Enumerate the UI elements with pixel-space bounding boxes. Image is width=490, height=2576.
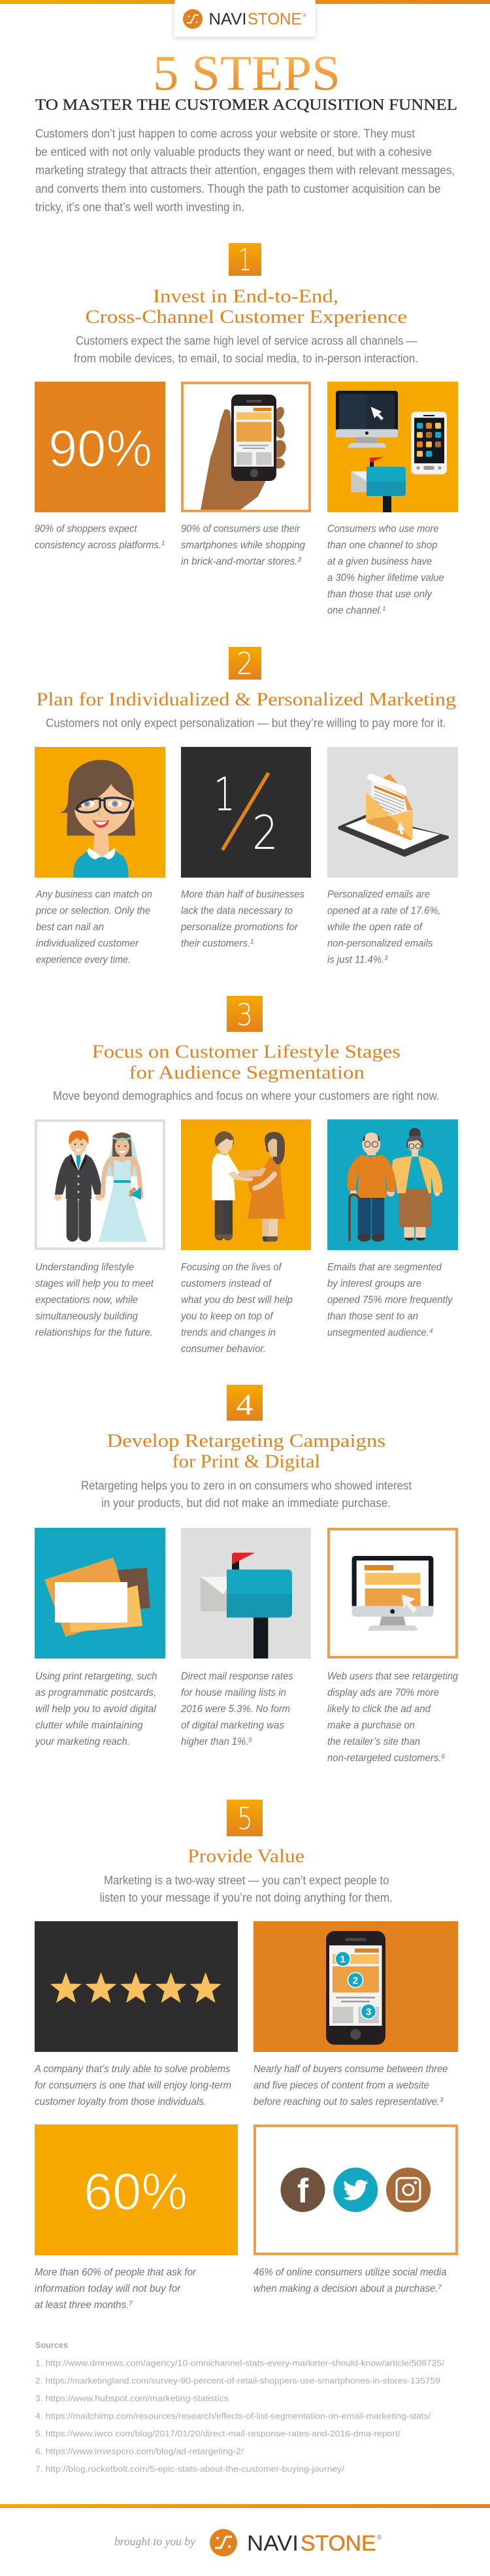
caption: lifetime value	[327, 523, 444, 616]
intro paragraph: Customers don’t just happen to come across your website or store. They must	[35, 127, 415, 140]
caption: social media: 46% of online consumers utilize social media	[253, 2267, 447, 2278]
caption: direct mail response: 2016 were 5.3%. No form	[180, 1704, 290, 1715]
panel: one half stat	[181, 747, 311, 878]
panel: five stars	[35, 1921, 238, 2052]
caption: direct mail response: for house mailing lists in	[181, 1687, 286, 1698]
caption: lack the data	[180, 889, 304, 949]
step 3 description: Move beyond demographics and focus on where your customers are right now.	[53, 1089, 439, 1102]
step number 2: 2	[237, 646, 253, 682]
sources list	[35, 2340, 444, 2474]
sources list: 1. http://www.dmnews.com/agency/10-omnichannel-stats-every-marketer-should-know/article/508725/	[35, 2358, 444, 2368]
icon: open envelope	[366, 774, 413, 840]
figure: old man	[348, 1132, 396, 1242]
caption: display ads: make a purchase on	[327, 1720, 415, 1731]
caption: lives of customers: customers instead of	[181, 1278, 272, 1289]
caption: 60% not buying: information today will not buy for	[35, 2283, 181, 2294]
caption: individualized experience	[35, 889, 152, 966]
logo: Navistone top: NAVI	[209, 10, 247, 29]
panel: devices and mailbox	[327, 382, 458, 512]
caption: 60% not buying: at least three months.⁷	[35, 2300, 133, 2311]
caption: print retargeting: your marketing reach.	[35, 1736, 130, 1747]
logo: Navistone footer: ®	[377, 2534, 382, 2541]
panel: mailbox	[181, 1528, 311, 1659]
caption: individualized experience: price or selection. Only the	[35, 906, 150, 917]
step 2 section	[35, 646, 458, 966]
step 5 description	[100, 1874, 393, 1904]
caption: 90% consistency: 90% of shoppers expect	[35, 523, 137, 535]
caption: loyalty: for consumers is one that will enjoy long-term	[35, 2080, 231, 2091]
step 2 description: Customers not only expect personalization — but they’re willing to pay more for it.	[46, 717, 446, 730]
panel: hand holding phone	[182, 383, 310, 511]
logo: Navistone top	[174, 0, 316, 37]
caption: lifetime value: a 30% higher lifetime value	[327, 572, 444, 584]
step number 5: 5	[237, 1801, 253, 1836]
panel: postcards	[35, 1528, 165, 1659]
step 4 description: Retargeting helps you to zero in on consumers who showed interest	[81, 1479, 412, 1492]
step 5 section	[34, 1800, 458, 2311]
caption: 60% not buying: More than 60% of people that ask for	[35, 2267, 197, 2278]
caption: lives of customers: trends and changes in	[181, 1327, 276, 1338]
panel: 90% stat	[35, 382, 165, 512]
figure: groom	[55, 1131, 103, 1242]
step number 3: 3	[237, 997, 253, 1032]
caption: display ads: the retailer’s site than	[327, 1736, 420, 1747]
panel: email on tablet	[327, 747, 458, 878]
step 4 heading: for Print & Digital	[172, 1451, 320, 1472]
intro paragraph: tricky, it’s one that’s well worth investing in.	[35, 201, 244, 214]
caption: print retargeting: clutter while maintaining	[35, 1720, 143, 1731]
icon: mailbox	[351, 457, 406, 512]
figure: woman	[228, 1132, 285, 1242]
logo: Navistone top: ®	[303, 13, 307, 18]
caption: email open rates: while the open rate of	[327, 922, 423, 933]
panel: 60% stat	[35, 2124, 238, 2255]
step 4 description	[81, 1479, 412, 1510]
logo: Navistone footer	[210, 2529, 382, 2556]
icon: facebook	[281, 2168, 325, 2212]
step 1 heading: Invest in End-to-End,	[153, 286, 338, 307]
intro paragraph: and converts them into customers. Though the path to customer acquisition can be	[35, 182, 440, 195]
step number 2	[229, 646, 261, 682]
step 2 heading: Plan for Individualized & Personalized Marketing	[37, 689, 456, 710]
caption: smartphones while shopping	[181, 523, 305, 567]
intro paragraph: marketing strategy that attracts their attention, engages them with relevant messages,	[35, 164, 455, 177]
caption: smartphones while shopping: 90% of consumers use their	[181, 523, 301, 535]
panel: expecting couple	[181, 1119, 311, 1250]
panel: social media icons	[255, 2126, 457, 2254]
step number 1	[229, 242, 261, 278]
caption: lifetime value: than those that use only	[327, 589, 433, 600]
caption: lack the data: lack the data necessary to	[181, 906, 293, 917]
caption: lifetime value: Consumers who use more	[327, 523, 439, 535]
caption: print retargeting	[35, 1671, 157, 1747]
step number 4: 4	[237, 1388, 253, 1421]
caption: direct mail response: of digital marketing was	[181, 1720, 284, 1731]
panel: wedding couple	[36, 1121, 164, 1249]
panel: one half stat: 1	[214, 768, 235, 821]
caption: display ads: Web users that see retargeting	[327, 1671, 458, 1682]
caption: display ads: likely to click the ad and	[327, 1704, 431, 1715]
step 1 description	[74, 335, 418, 365]
step number 4	[227, 1385, 263, 1421]
step number 5	[227, 1800, 263, 1836]
sources list: 6. https://www.invespcro.com/blog/ad-retargeting-2/	[35, 2447, 244, 2456]
caption: email open rates: is just 11.4%.³	[327, 955, 388, 966]
caption: lifestyle stages: simultaneously building	[35, 1311, 138, 1322]
caption: social media	[253, 2267, 447, 2294]
badge 3	[361, 2004, 376, 2019]
caption: individualized experience: individualized customer	[36, 938, 139, 949]
step 1 description: Customers expect the same high level of service across all channels —	[76, 335, 417, 348]
step 3 heading: Focus on Customer Lifestyle Stages	[92, 1042, 400, 1063]
sources list: 2. https://marketingland.com/survey-90-percent-of-retail-shoppers-use-smartphones-in-stores-135759	[35, 2375, 440, 2385]
caption: lifetime value: one channel.¹	[327, 605, 385, 616]
caption: loyalty: customer loyalty from those individuals.	[35, 2096, 206, 2107]
step 3 heading	[92, 1042, 400, 1083]
caption: lives of customers: you to keep on top of	[180, 1311, 274, 1322]
caption: lifestyle stages: Understanding lifestyle	[35, 1262, 134, 1273]
caption: print retargeting: as programmatic postcards,	[35, 1687, 156, 1698]
step 5 description: listen to your message if you’re not doing anything for them.	[100, 1891, 393, 1904]
caption: 90% consistency	[35, 523, 165, 551]
sources list: 5. https://www.iwco.com/blog/2017/01/20/direct-mail-response-rates-and-2016-dma-report/	[35, 2429, 400, 2439]
caption: segmented emails: than those sent to an	[327, 1311, 418, 1322]
icon: tablet	[338, 815, 449, 857]
caption: content consumption: and five pieces of content from a website	[253, 2080, 429, 2091]
caption: lifestyle stages	[35, 1262, 154, 1338]
caption: social media: when making a decision about a purchase.⁷	[253, 2283, 442, 2294]
step 5 heading: Provide Value	[188, 1845, 304, 1866]
caption: content consumption	[253, 2064, 448, 2107]
icon: twitter	[333, 2168, 378, 2212]
icon: smartphone	[411, 412, 447, 474]
step 4 section	[35, 1385, 458, 1764]
step 1 description: from mobile devices, to email, to social media, to in-person interaction.	[74, 352, 418, 365]
caption: email open rates: non-personalized emails	[327, 938, 433, 949]
caption: loyalty: A company that’s truly able to solve problems	[34, 2064, 231, 2075]
caption: print retargeting: will help you to avoid digital	[35, 1704, 156, 1715]
caption: lack the data: their customers.¹	[181, 938, 253, 949]
caption: print retargeting: Using print retargeting, such	[35, 1671, 157, 1682]
caption: segmented emails	[327, 1262, 453, 1338]
caption: individualized experience: experience every time.	[36, 955, 131, 966]
panel: monitor with ad	[329, 1529, 457, 1657]
badge 1: 1	[340, 1954, 346, 1965]
caption: direct mail response: higher than 1%.⁵	[181, 1736, 253, 1747]
panel: 60% stat: 60%	[84, 2162, 188, 2221]
sources list: Sources	[35, 2340, 68, 2350]
step 1 heading: Cross-Channel Customer Experience	[85, 306, 407, 327]
caption: individualized experience: best can nail an	[36, 922, 104, 933]
caption: lives of customers: consumer behavior.	[181, 1344, 266, 1355]
badge 2: 2	[353, 1975, 358, 1986]
caption: email open rates	[327, 889, 440, 966]
caption: lack the data: personalize promotions for	[180, 922, 299, 933]
caption: smartphones while shopping: smartphones while shopping	[181, 540, 305, 551]
intro paragraph: be enticed with not only valuable products they want or need, but with a cohesive	[35, 146, 432, 159]
caption: segmented emails: opened 75% more frequently	[327, 1295, 453, 1306]
panel: elderly couple	[327, 1119, 458, 1250]
caption: segmented emails: by interest groups are	[327, 1278, 421, 1289]
caption: content consumption: before reaching out to sales representative.³	[253, 2096, 444, 2107]
caption: lack the data: More than half of businesses	[181, 889, 304, 900]
footer: brought to you by: brought to you by	[114, 2535, 195, 2548]
sources list: 3. https://www.hubspot.com/marketing-statistics	[35, 2393, 229, 2403]
caption: lifetime value: at a given business have	[327, 556, 432, 567]
panel: woman with glasses	[35, 747, 165, 878]
logo: Navistone footer: STONE	[301, 2531, 376, 2555]
caption: email open rates: opened at a rate of 17.6%,	[327, 906, 440, 917]
caption: lifestyle stages: expectations now, while	[35, 1295, 138, 1306]
caption: display ads: non-retargeted customers.⁶	[327, 1753, 446, 1764]
caption: lifestyle stages: relationships for the future.	[35, 1327, 153, 1338]
intro paragraph	[35, 127, 455, 214]
caption: lives of customers	[180, 1262, 293, 1355]
footer bar	[0, 2504, 490, 2508]
sources list: 4. https://mailchimp.com/resources/research/effects-of-list-segmentation-on-email-marketing-stats/	[35, 2411, 431, 2420]
caption: email open rates: Personalized emails are	[327, 889, 430, 900]
icon: facebook: f	[297, 2172, 309, 2210]
step 4 heading: Develop Retargeting Campaigns	[107, 1430, 385, 1451]
step 3 heading: for Audience Segmentation	[129, 1063, 365, 1083]
step 5 description: Marketing is a two-way street — you can’t expect people to	[104, 1874, 389, 1887]
caption: 90% consistency: consistency across platforms.¹	[35, 540, 165, 551]
header bar	[0, 0, 490, 4]
caption: smartphones while shopping: in brick-and-mortar stores.²	[181, 556, 301, 567]
figure: man	[212, 1131, 240, 1240]
caption: direct mail response: Direct mail response rates	[181, 1671, 293, 1682]
panel: phone with numbered content	[253, 1921, 458, 2052]
caption: display ads: display ads are 70% more	[327, 1687, 439, 1698]
step 3 section	[35, 996, 458, 1355]
panel: one half stat: 2	[252, 806, 278, 860]
badge 2	[348, 1972, 363, 1988]
caption: content consumption: Nearly half of buyers consume between three	[253, 2064, 448, 2075]
logo: Navistone top: STONE	[248, 10, 302, 29]
step number 3	[227, 996, 263, 1032]
step 1 section	[35, 242, 458, 616]
sources list: 7. http://blog.rocketbolt.com/5-epic-stats-about-the-customer-buying-journey/	[35, 2464, 344, 2474]
logo: Navistone footer: NAVI	[247, 2531, 299, 2555]
figure: old woman	[390, 1128, 442, 1241]
caption: segmented emails: Emails that are segmented	[327, 1262, 442, 1273]
caption: lives of customers: Focusing on the lives of	[181, 1262, 282, 1273]
icon: desktop monitor	[336, 391, 398, 448]
caption: lives of customers: what you do best will help	[181, 1295, 293, 1306]
figure: bride	[99, 1132, 147, 1242]
badge 1	[335, 1951, 350, 1966]
caption: display ads	[327, 1671, 458, 1764]
caption: lifetime value: than one channel to shop	[327, 540, 438, 551]
caption: segmented emails: unsegmented audience.⁴	[327, 1327, 433, 1338]
icon: instagram	[386, 2168, 431, 2212]
title: 5 STEPS	[153, 46, 340, 101]
step 4 heading	[107, 1430, 385, 1472]
caption: individualized experience: Any business can match on	[35, 889, 152, 900]
panel: 90% stat: 90%	[48, 419, 152, 477]
badge 3: 3	[366, 2006, 371, 2017]
step number 1: 1	[238, 242, 252, 278]
caption: lifestyle stages: stages will help you to meet	[35, 1278, 154, 1289]
caption: 60% not buying	[35, 2267, 197, 2311]
caption: direct mail response	[180, 1671, 293, 1747]
caption: loyalty	[34, 2064, 231, 2107]
step 1 heading	[85, 286, 407, 327]
subtitle: TO MASTER THE CUSTOMER ACQUISITION FUNNEL	[35, 97, 457, 114]
step 4 description: in your products, but did not make an immediate purchase.	[101, 1496, 391, 1510]
